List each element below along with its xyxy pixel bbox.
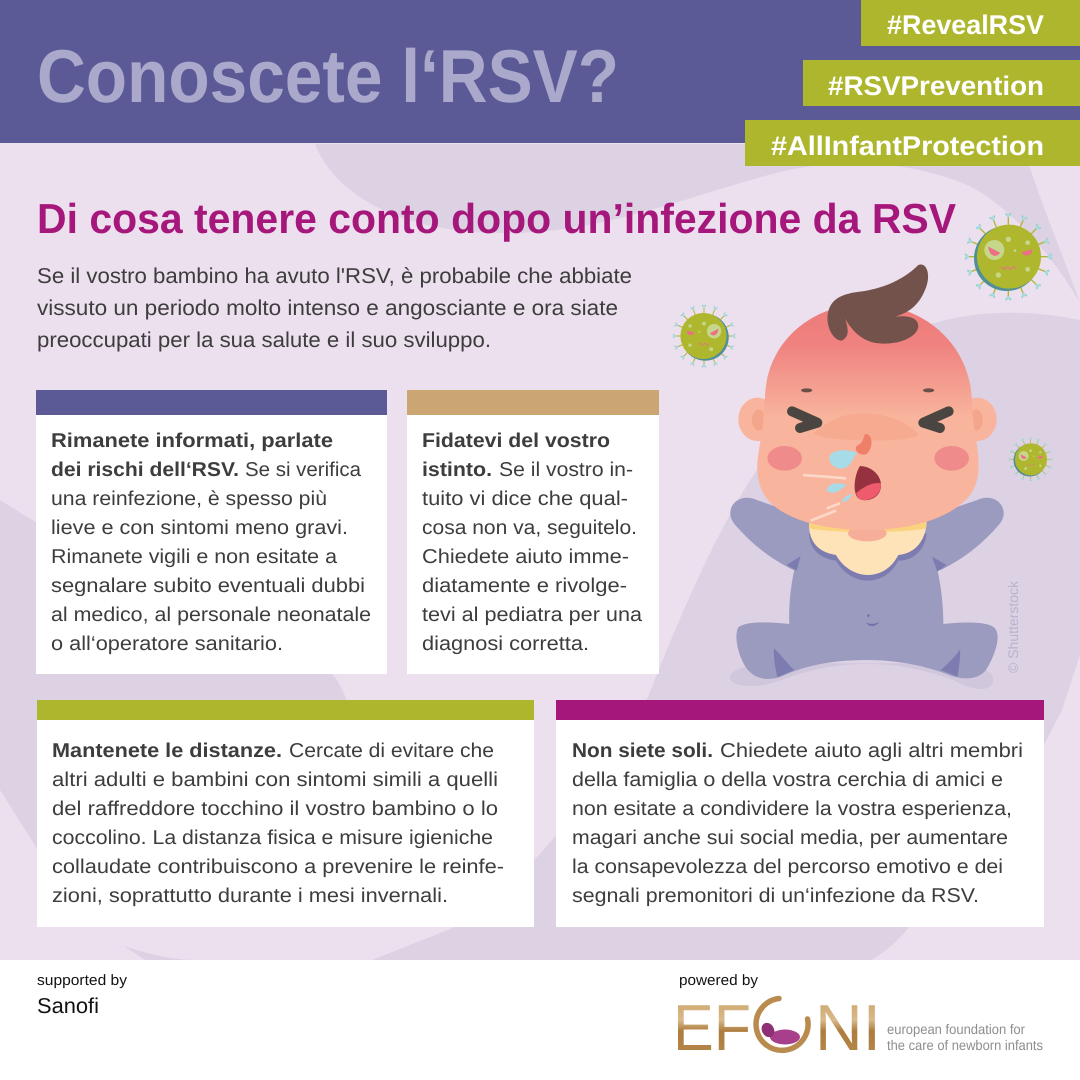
logo: EFCNI: NI (815, 991, 881, 1064)
tag: RSVPrevention (803, 60, 1080, 106)
panel: trust your instinct: tevi al pediatra per una (422, 604, 643, 626)
hashtag tags (745, 0, 1080, 166)
panel: you are not alone: la consapevolezza del percorso emotivo e dei (572, 856, 1003, 878)
heading: Di cosa tenere conto dopo un’infezione da RSV (37, 195, 956, 242)
footer: supported by: supported by (37, 972, 128, 989)
panel: trust your instinct: Fidatevi del vostro (422, 430, 610, 452)
panel: keep your distance: zioni, soprattutto durante i mesi invernali. (52, 885, 448, 907)
panel: trust your instinct: cosa non va, seguitelo. (422, 517, 637, 539)
illustration: sick baby with viruses (673, 213, 1052, 689)
tag: RevealRSV (861, 0, 1080, 46)
panel: you are not alone (556, 700, 1044, 927)
panel: you are not alone: non esitate a condividere la vostra esperienza, (572, 798, 1012, 820)
panel: you are not alone: Chiedete aiuto agli altri membri (720, 740, 1023, 762)
panel: stay informed: al medico, al personale neonatale (51, 604, 371, 626)
logo mark: C ring with baby (756, 998, 808, 1050)
panel: stay informed: Rimanete vigili e non esitate a (51, 546, 338, 568)
tag: RSVPrevention: #RSVPrevention (828, 71, 1044, 101)
panel: keep your distance: del raffreddore tocchino il vostro bambino o lo (52, 798, 498, 820)
footer: supported by (37, 972, 128, 1018)
panel: keep your distance: collaudate contribuiscono a prevenire le reinfe- (52, 856, 504, 878)
panel: keep your distance: Cercate di evitare che (289, 740, 494, 762)
panel: trust your instinct: Chiedete aiuto imme- (422, 546, 629, 568)
panel: keep your distance: altri adulti e bambini con sintomi simili a quelli (52, 769, 498, 791)
intro text: Se il vostro bambino ha avuto l'RSV, è probabile che abbiate (37, 264, 632, 288)
panel: stay informed: Se si verifica (245, 459, 362, 481)
virus: right small (1009, 438, 1052, 481)
logo: EFCNI: the care of newborn infants (887, 1037, 1043, 1053)
panel: you are not alone: Non siete soli. (572, 740, 713, 762)
panel: you are not alone: della famiglia o della vostra cerchia di amici e (572, 769, 1003, 791)
panel: keep your distance (37, 700, 534, 927)
footer: supported by: Sanofi (37, 994, 99, 1018)
logo: EFCNI: EF (673, 991, 751, 1064)
panel: trust your instinct: istinto. (422, 459, 492, 481)
panel: keep your distance: Mantenete le distanze. (52, 740, 282, 762)
footer: powered by: powered by (679, 972, 758, 989)
panel: trust your instinct: diatamente e rivolge- (422, 575, 627, 597)
panel: trust your instinct: diagnosi corretta. (422, 633, 589, 655)
panel: keep your distance: coccolino. La distanza fisica e misure igieniche (52, 827, 493, 849)
logo: EFCNI: european foundation for (887, 1021, 1025, 1037)
intro text: vissuto un periodo molto intenso e angosciante e ora siate (37, 296, 618, 320)
virus: left (673, 305, 735, 367)
title: Conoscete l‘RSV? (37, 34, 619, 118)
panel: stay informed (36, 390, 387, 674)
header band (0, 0, 1080, 143)
panel: you are not alone: segnali premonitori di un‘infezione da RSV. (572, 885, 979, 907)
panel: trust your instinct (407, 390, 659, 674)
photo credit: © Shutterstock (1005, 580, 1021, 673)
panel: stay informed: o all‘operatore sanitario. (51, 633, 283, 655)
tag: AllInfantProtection: #AllInfantProtection (771, 131, 1044, 161)
panel: stay informed: una reinfezione, è spesso più (51, 488, 327, 510)
panel: trust your instinct: Se il vostro in- (499, 459, 633, 481)
virus: upper right (965, 213, 1052, 300)
baby (730, 264, 1004, 689)
intro text (37, 264, 632, 352)
tag: RevealRSV: #RevealRSV (887, 10, 1044, 40)
intro text: preoccupati per la sua salute e il suo sviluppo. (37, 328, 491, 352)
panel: stay informed: segnalare subito eventuali dubbi (51, 575, 365, 597)
tag: AllInfantProtection (745, 120, 1080, 166)
panel: stay informed: Rimanete informati, parlate (51, 430, 333, 452)
panel: you are not alone: magari anche sui social media, per aumentare (572, 827, 1008, 849)
panel: trust your instinct: tuito vi dice che qual- (422, 488, 628, 510)
logo: EFCNI (673, 991, 1043, 1064)
panel: stay informed: dei rischi dell‘RSV. (51, 459, 239, 481)
panel: stay informed: lieve e con sintomi meno gravi. (51, 517, 348, 539)
